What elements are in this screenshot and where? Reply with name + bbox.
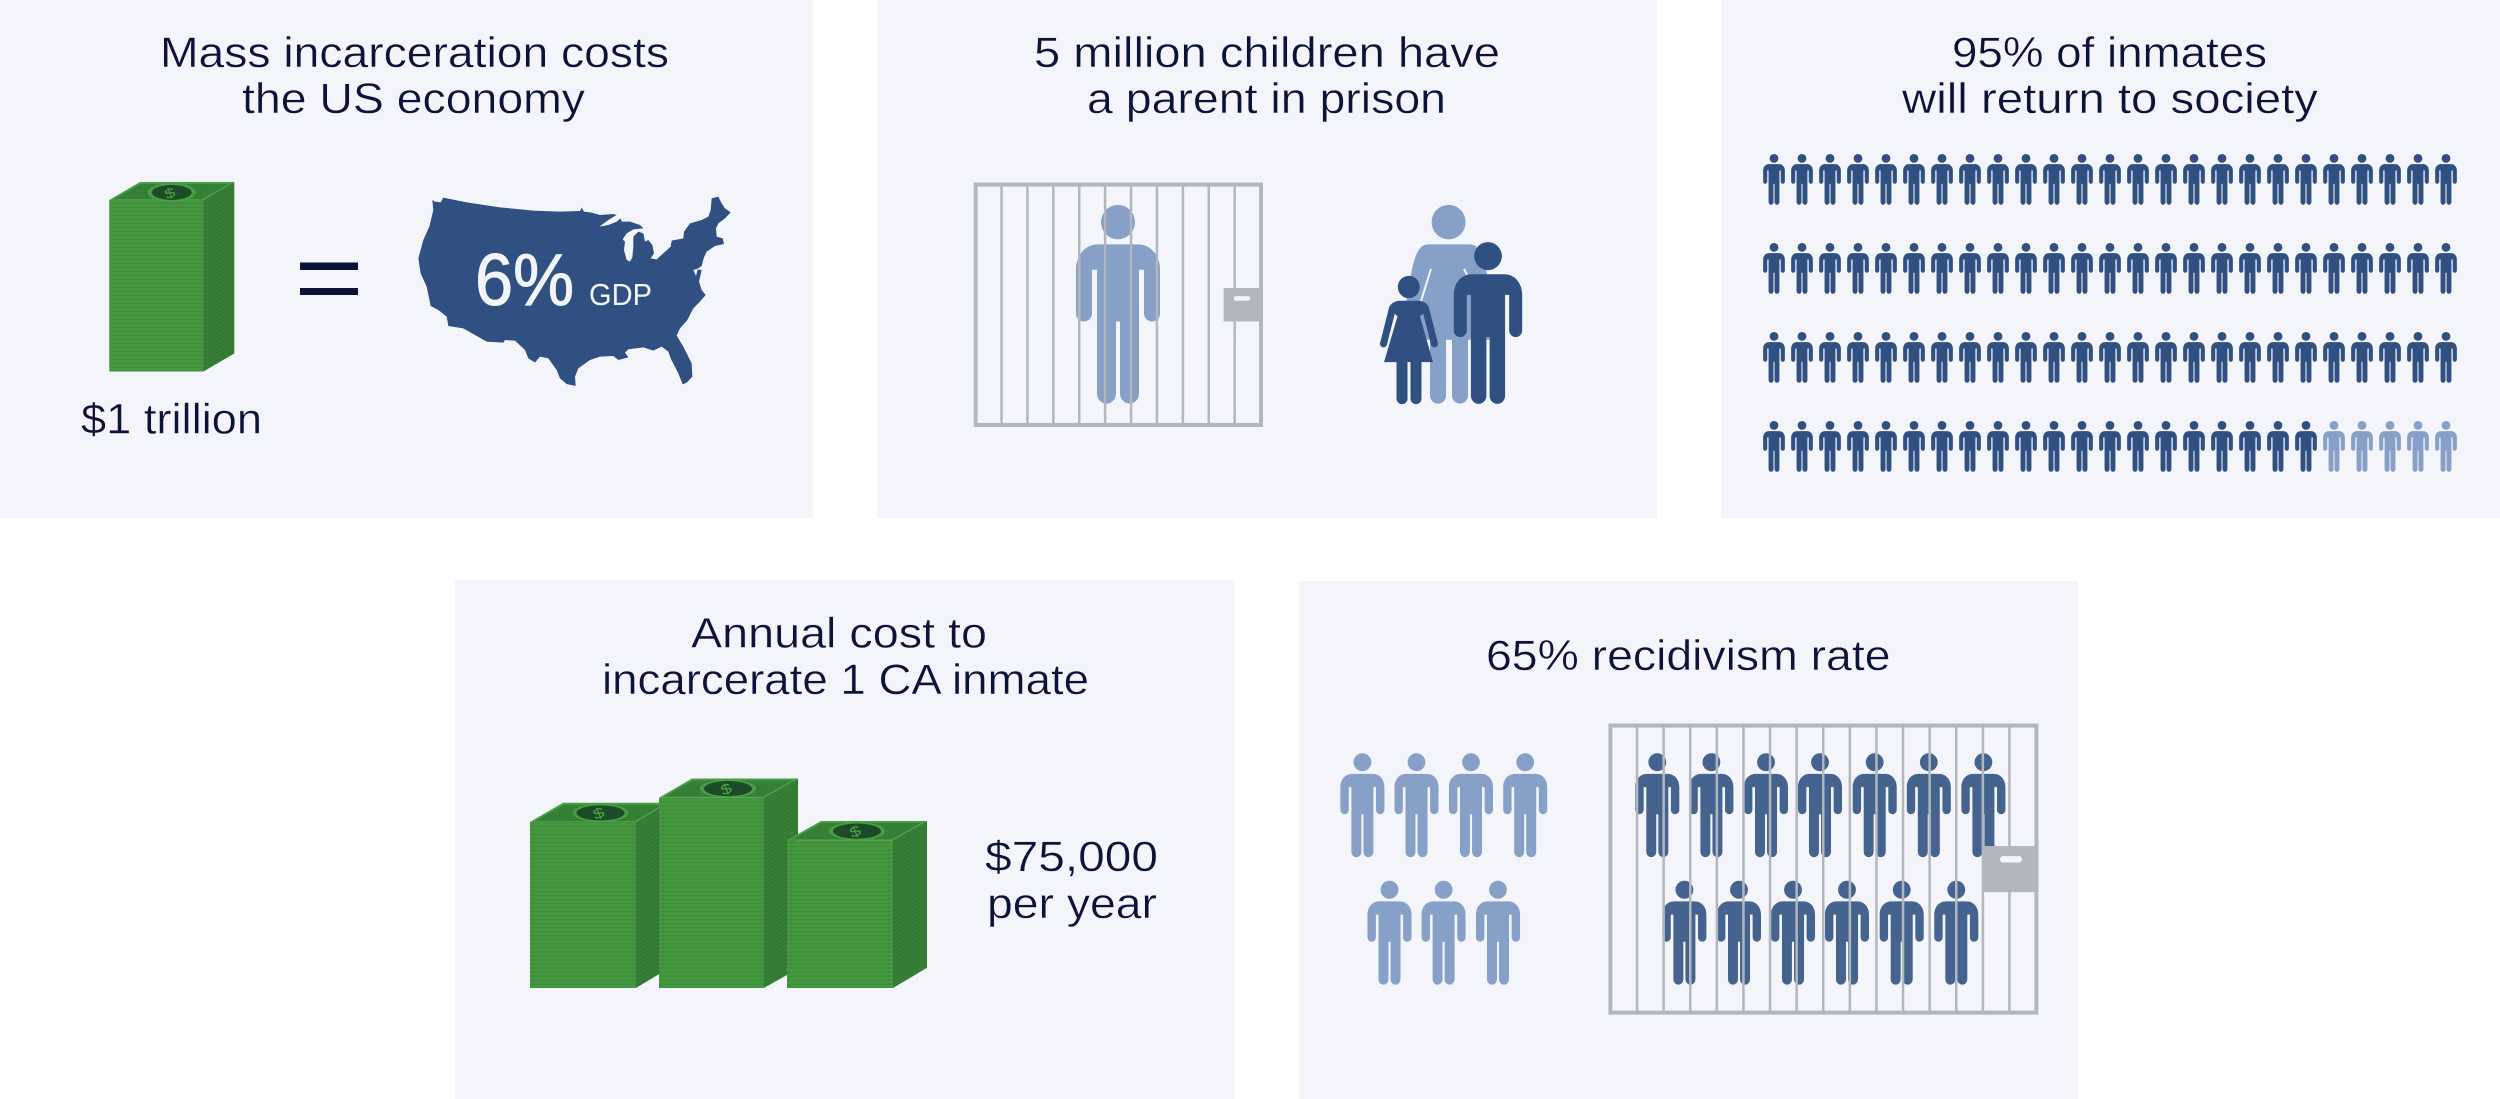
icon: stack of money [109,182,234,372]
icon: stack of money: $ [163,185,178,203]
icon: thirteen people behind bars [1610,726,2038,1013]
panel: children with a parent in prison [877,0,1657,518]
heading: ninety-five percent of inmates: will return to society [1901,75,2319,123]
icon: money stack right: $ [847,822,864,841]
heading: annual cost [602,610,1089,704]
heading: ninety-five percent of inmates [1901,29,2319,123]
label: seventy-five thousand per year: $75,000 [985,833,1158,881]
heading: five million children: a parent in prison [1087,75,1446,123]
heading: annual cost: Annual cost to [691,610,987,658]
map: United States with 6% GDP [418,197,731,386]
heading: recidivism rate: 65% recidivism rate [1486,632,1890,680]
panel: US economy cost [0,0,813,518]
pictogram row 2 [1763,243,2457,294]
map: United States with 6% GDP: 6% [475,240,574,321]
panel: inmates returning to society [1721,0,2500,518]
panel: recidivism rate [1299,581,2078,1099]
icon: money stack middle [659,779,798,988]
icon: money stack middle: $ [718,780,735,799]
heading: ninety-five percent of inmates: 95% of inmates [1952,29,2267,77]
heading: mass incarceration costs: Mass incarceration costs [160,29,669,77]
label: one trillion dollars: $1 trillion [81,396,262,444]
label: seventy-five thousand per year [985,833,1158,928]
icon: money stack right [787,821,927,988]
label: seventy-five thousand per year: per year [987,880,1157,928]
heading: annual cost: incarcerate 1 CA inmate [602,656,1089,704]
icon: equals sign [300,262,358,295]
icon: money stack left: $ [591,804,607,823]
pictogram row 1 [1763,154,2457,205]
heading: five million children [1034,29,1500,123]
icon: money stack left [530,803,668,988]
map: United States with 6% GDP: GDP [589,277,652,312]
panel: annual cost per inmate [455,580,1235,1099]
pictogram row 3 [1763,332,2457,383]
pictogram row 4 with five light figures [1763,421,2457,472]
icon: parent behind bars [976,185,1263,425]
pictogram: seven people outside prison [1340,753,1547,985]
heading: mass incarceration costs [160,29,669,123]
heading: five million children: 5 million children have [1034,29,1500,77]
icon: family of mother and two children [1384,205,1522,404]
heading: mass incarceration costs: the US economy [242,75,586,123]
